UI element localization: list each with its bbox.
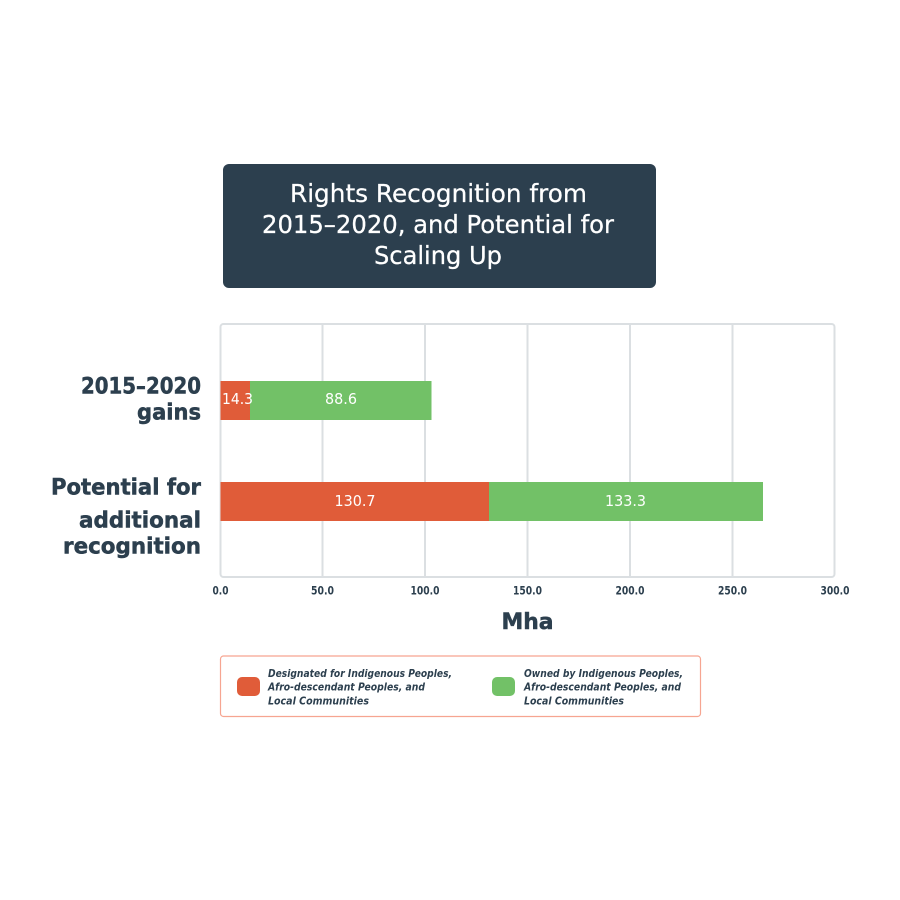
category labels: additional xyxy=(79,508,201,534)
axis tick labels: 0.0 xyxy=(212,584,228,598)
axis tick labels xyxy=(212,584,850,598)
title xyxy=(223,164,656,288)
axis tick labels: 250.0 xyxy=(718,584,747,598)
bar: potential for additional recognition: 130.7 xyxy=(334,492,376,510)
legend item: owned: Afro-descendant Peoples, and xyxy=(523,680,681,694)
axis tick labels: 200.0 xyxy=(616,584,644,598)
axis tick labels: 300.0 xyxy=(820,584,850,598)
legend item: designated: Local Communities xyxy=(268,694,369,708)
bar: potential for additional recognition xyxy=(220,482,763,521)
bar: 2015–2020 gains: 14.3 xyxy=(222,390,253,408)
legend item: owned: Owned by Indigenous Peoples, xyxy=(524,667,683,680)
title: Scaling Up xyxy=(374,241,502,270)
category labels xyxy=(51,374,201,560)
bar chart xyxy=(51,324,850,635)
title: Rights Recognition from xyxy=(290,179,587,208)
legend item: designated: Afro-descendant Peoples, and xyxy=(267,680,425,694)
bar: potential for additional recognition: 133.3 xyxy=(605,492,646,510)
legend item: owned: Local Communities xyxy=(524,694,624,708)
axis tick labels: 100.0 xyxy=(410,584,440,598)
legend item: designated xyxy=(237,667,452,708)
legend item: owned xyxy=(492,667,683,708)
legend xyxy=(220,656,700,716)
category labels: gains xyxy=(137,400,201,426)
legend item: designated: Designated for Indigenous Peoples, xyxy=(268,667,452,680)
bar: 2015–2020 gains xyxy=(220,381,432,420)
category labels: Potential for xyxy=(51,476,201,500)
bar: 2015–2020 gains: 88.6 xyxy=(325,390,357,408)
axis title: Mha xyxy=(502,610,554,635)
axis tick labels: 50.0 xyxy=(311,584,334,598)
category labels: 2015–2020 xyxy=(81,374,201,400)
category labels: recognition xyxy=(63,534,201,560)
axis tick labels: 150.0 xyxy=(513,584,542,598)
title: 2015–2020, and Potential for xyxy=(262,210,615,239)
